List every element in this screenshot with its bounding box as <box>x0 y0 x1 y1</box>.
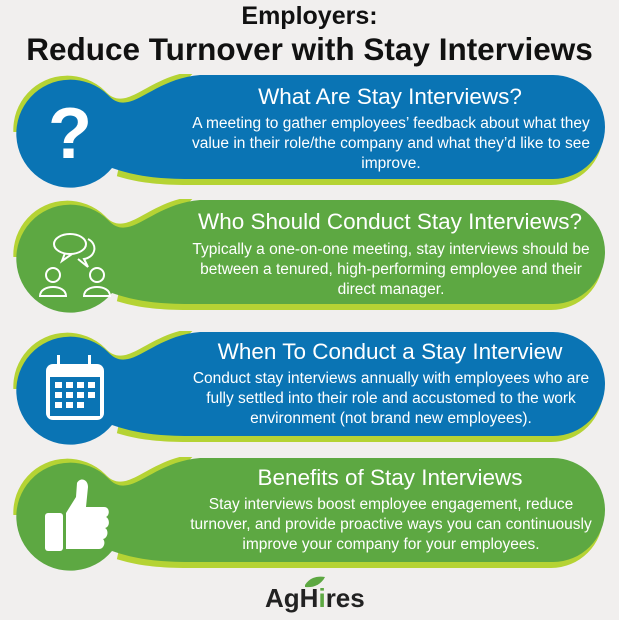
text block: A meeting to gather employees’ feedback about what they value in their role/the company and what they’d like to see improve. <box>192 115 590 172</box>
logo: AgHires: AgHires <box>265 583 365 613</box>
text block: Stay interviews boost employee engagement, reduce turnover, and provide proactive ways you can continuously improve your company for your employees. <box>190 496 592 553</box>
icon: calendar <box>46 355 104 420</box>
icon: people talking <box>40 234 110 296</box>
icon: question mark: ? <box>48 94 92 174</box>
heading: What Are Stay Interviews? <box>258 84 522 109</box>
heading: Who Should Conduct Stay Interviews? <box>198 209 582 234</box>
subtitle heading: Reduce Turnover with Stay Interviews <box>26 31 593 67</box>
panel: benefits <box>13 457 605 571</box>
icon: thumbs up <box>45 480 109 551</box>
panel: what are stay interviews <box>13 74 605 188</box>
heading: When To Conduct a Stay Interview <box>218 339 562 364</box>
heading: Benefits of Stay Interviews <box>257 465 523 490</box>
panel: when to conduct <box>13 331 605 445</box>
text block: Typically a one-on-one meeting, stay interviews should be between a tenured, high-performing employee and their direct manager. <box>192 241 590 298</box>
text block: Conduct stay interviews annually with employees who are fully settled into their role and accustomed to the work environment (not brand new employees). <box>193 370 589 427</box>
title: Employers: <box>241 2 378 30</box>
icon: leaf <box>305 577 325 587</box>
panel: who should conduct <box>13 199 605 313</box>
